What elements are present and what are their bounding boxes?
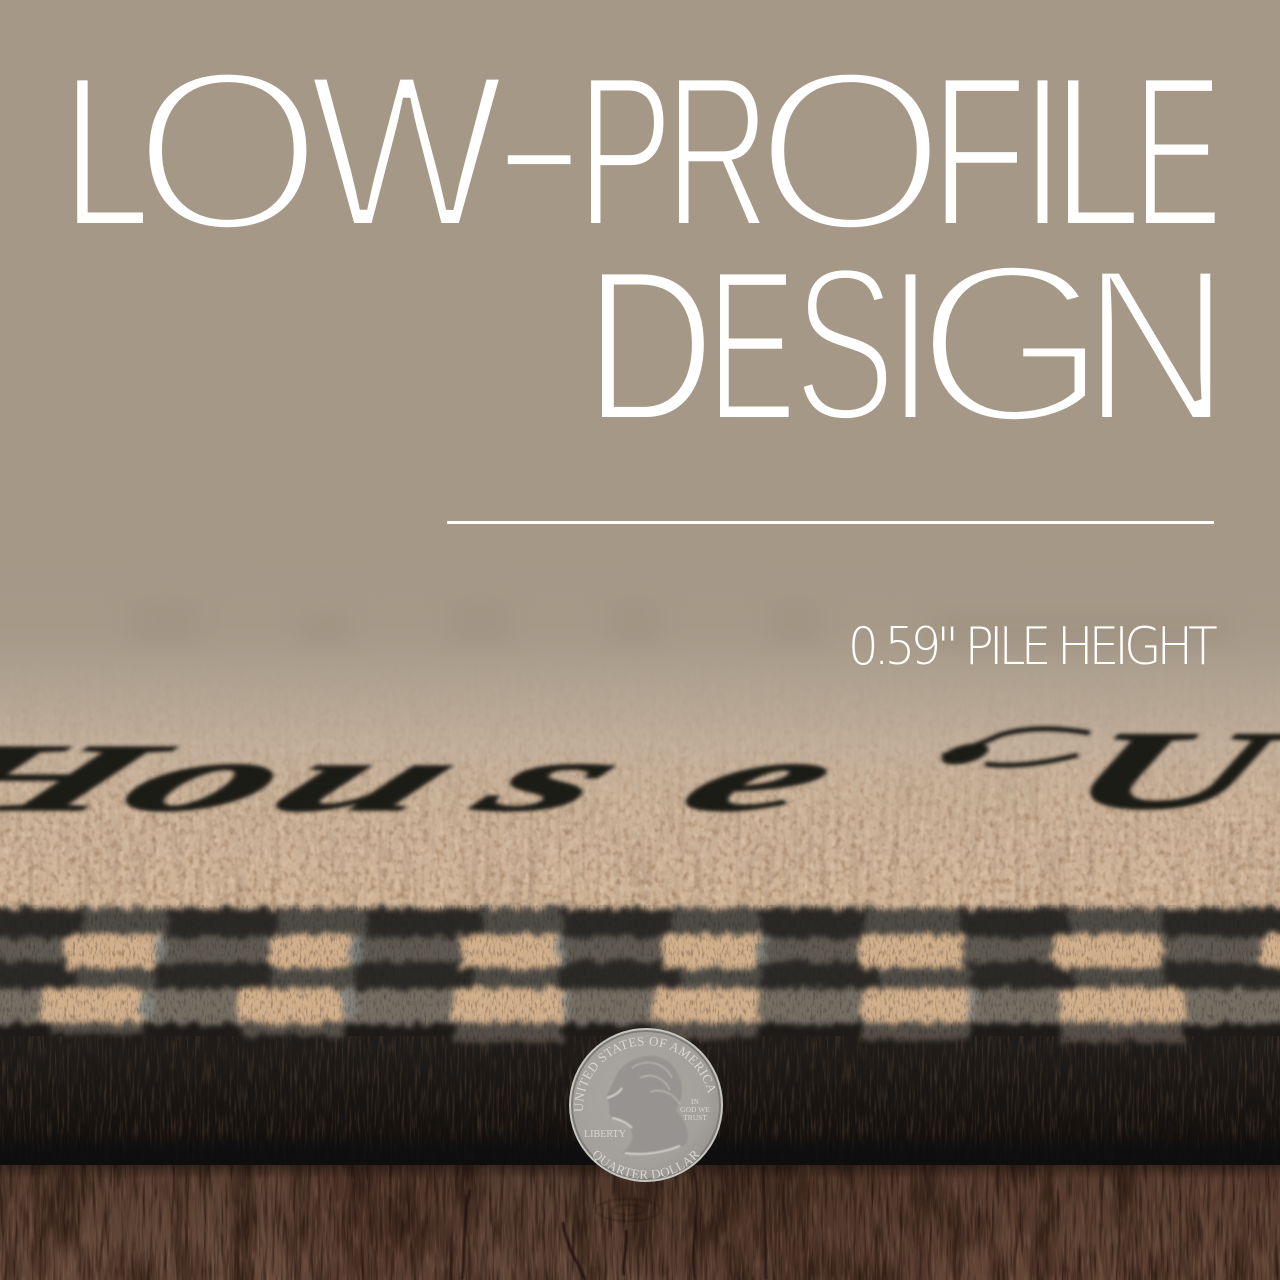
text: I	[890, 224, 932, 466]
coin portrait	[606, 1056, 688, 1155]
backdrop and blurred mat surface	[0, 0, 1280, 930]
tan check squares	[41, 934, 1280, 1023]
wood cracks and knot	[462, 1165, 766, 1280]
hair texture over check border	[0, 905, 1280, 1040]
subtitle: pile height: 0.59" PILE HEIGHT	[848, 617, 1217, 677]
grey crossing rows	[76, 909, 1165, 988]
coin inscriptions: GOD WE	[680, 1105, 710, 1114]
product photo: doormat edge with coin on a wood floor	[0, 626, 1280, 1280]
mat lettering flourish	[942, 729, 1090, 765]
blurred background pattern	[130, 598, 1230, 650]
text: -	[489, 21, 590, 263]
mat side pile	[0, 1036, 1280, 1166]
text: E	[707, 224, 796, 466]
mat lettering out of focus	[0, 708, 1280, 832]
coin inscriptions	[574, 1036, 716, 1179]
text: L	[1053, 30, 1141, 272]
text: D	[585, 224, 715, 466]
black pile upper edge	[0, 1024, 1280, 1084]
text: W	[308, 28, 505, 274]
text: O	[132, 22, 323, 279]
coin inscriptions: UNITED STATES OF AMERICA	[574, 1036, 716, 1112]
text: E	[1133, 30, 1222, 272]
text: L	[62, 30, 150, 272]
quarter coin for scale	[569, 1028, 723, 1182]
coin inscriptions: TRUST	[683, 1113, 707, 1122]
text: I	[1022, 30, 1064, 272]
lower grey row	[0, 989, 1280, 1023]
wood floor	[0, 1165, 1280, 1280]
text: G	[915, 217, 1109, 471]
gingham check border	[0, 908, 1280, 1084]
title line 2	[585, 217, 1231, 471]
title line 1	[62, 21, 1222, 279]
text: R	[665, 30, 770, 272]
coin inscriptions: QUARTER DOLLAR	[593, 1150, 700, 1179]
text: O	[754, 22, 947, 279]
text: F	[930, 30, 1027, 272]
dark check rows	[0, 909, 1280, 989]
coin inscriptions: IN	[691, 1097, 700, 1106]
text: P	[577, 30, 673, 272]
mat fibre texture	[0, 725, 1280, 912]
text: N	[1082, 222, 1231, 468]
text: S	[793, 221, 896, 467]
coin inscriptions: LIBERTY	[584, 1129, 626, 1140]
pale edges on tan squares	[139, 937, 977, 1019]
divider rule	[447, 521, 1214, 524]
frayed fibres under tan squares	[50, 1022, 1184, 1042]
